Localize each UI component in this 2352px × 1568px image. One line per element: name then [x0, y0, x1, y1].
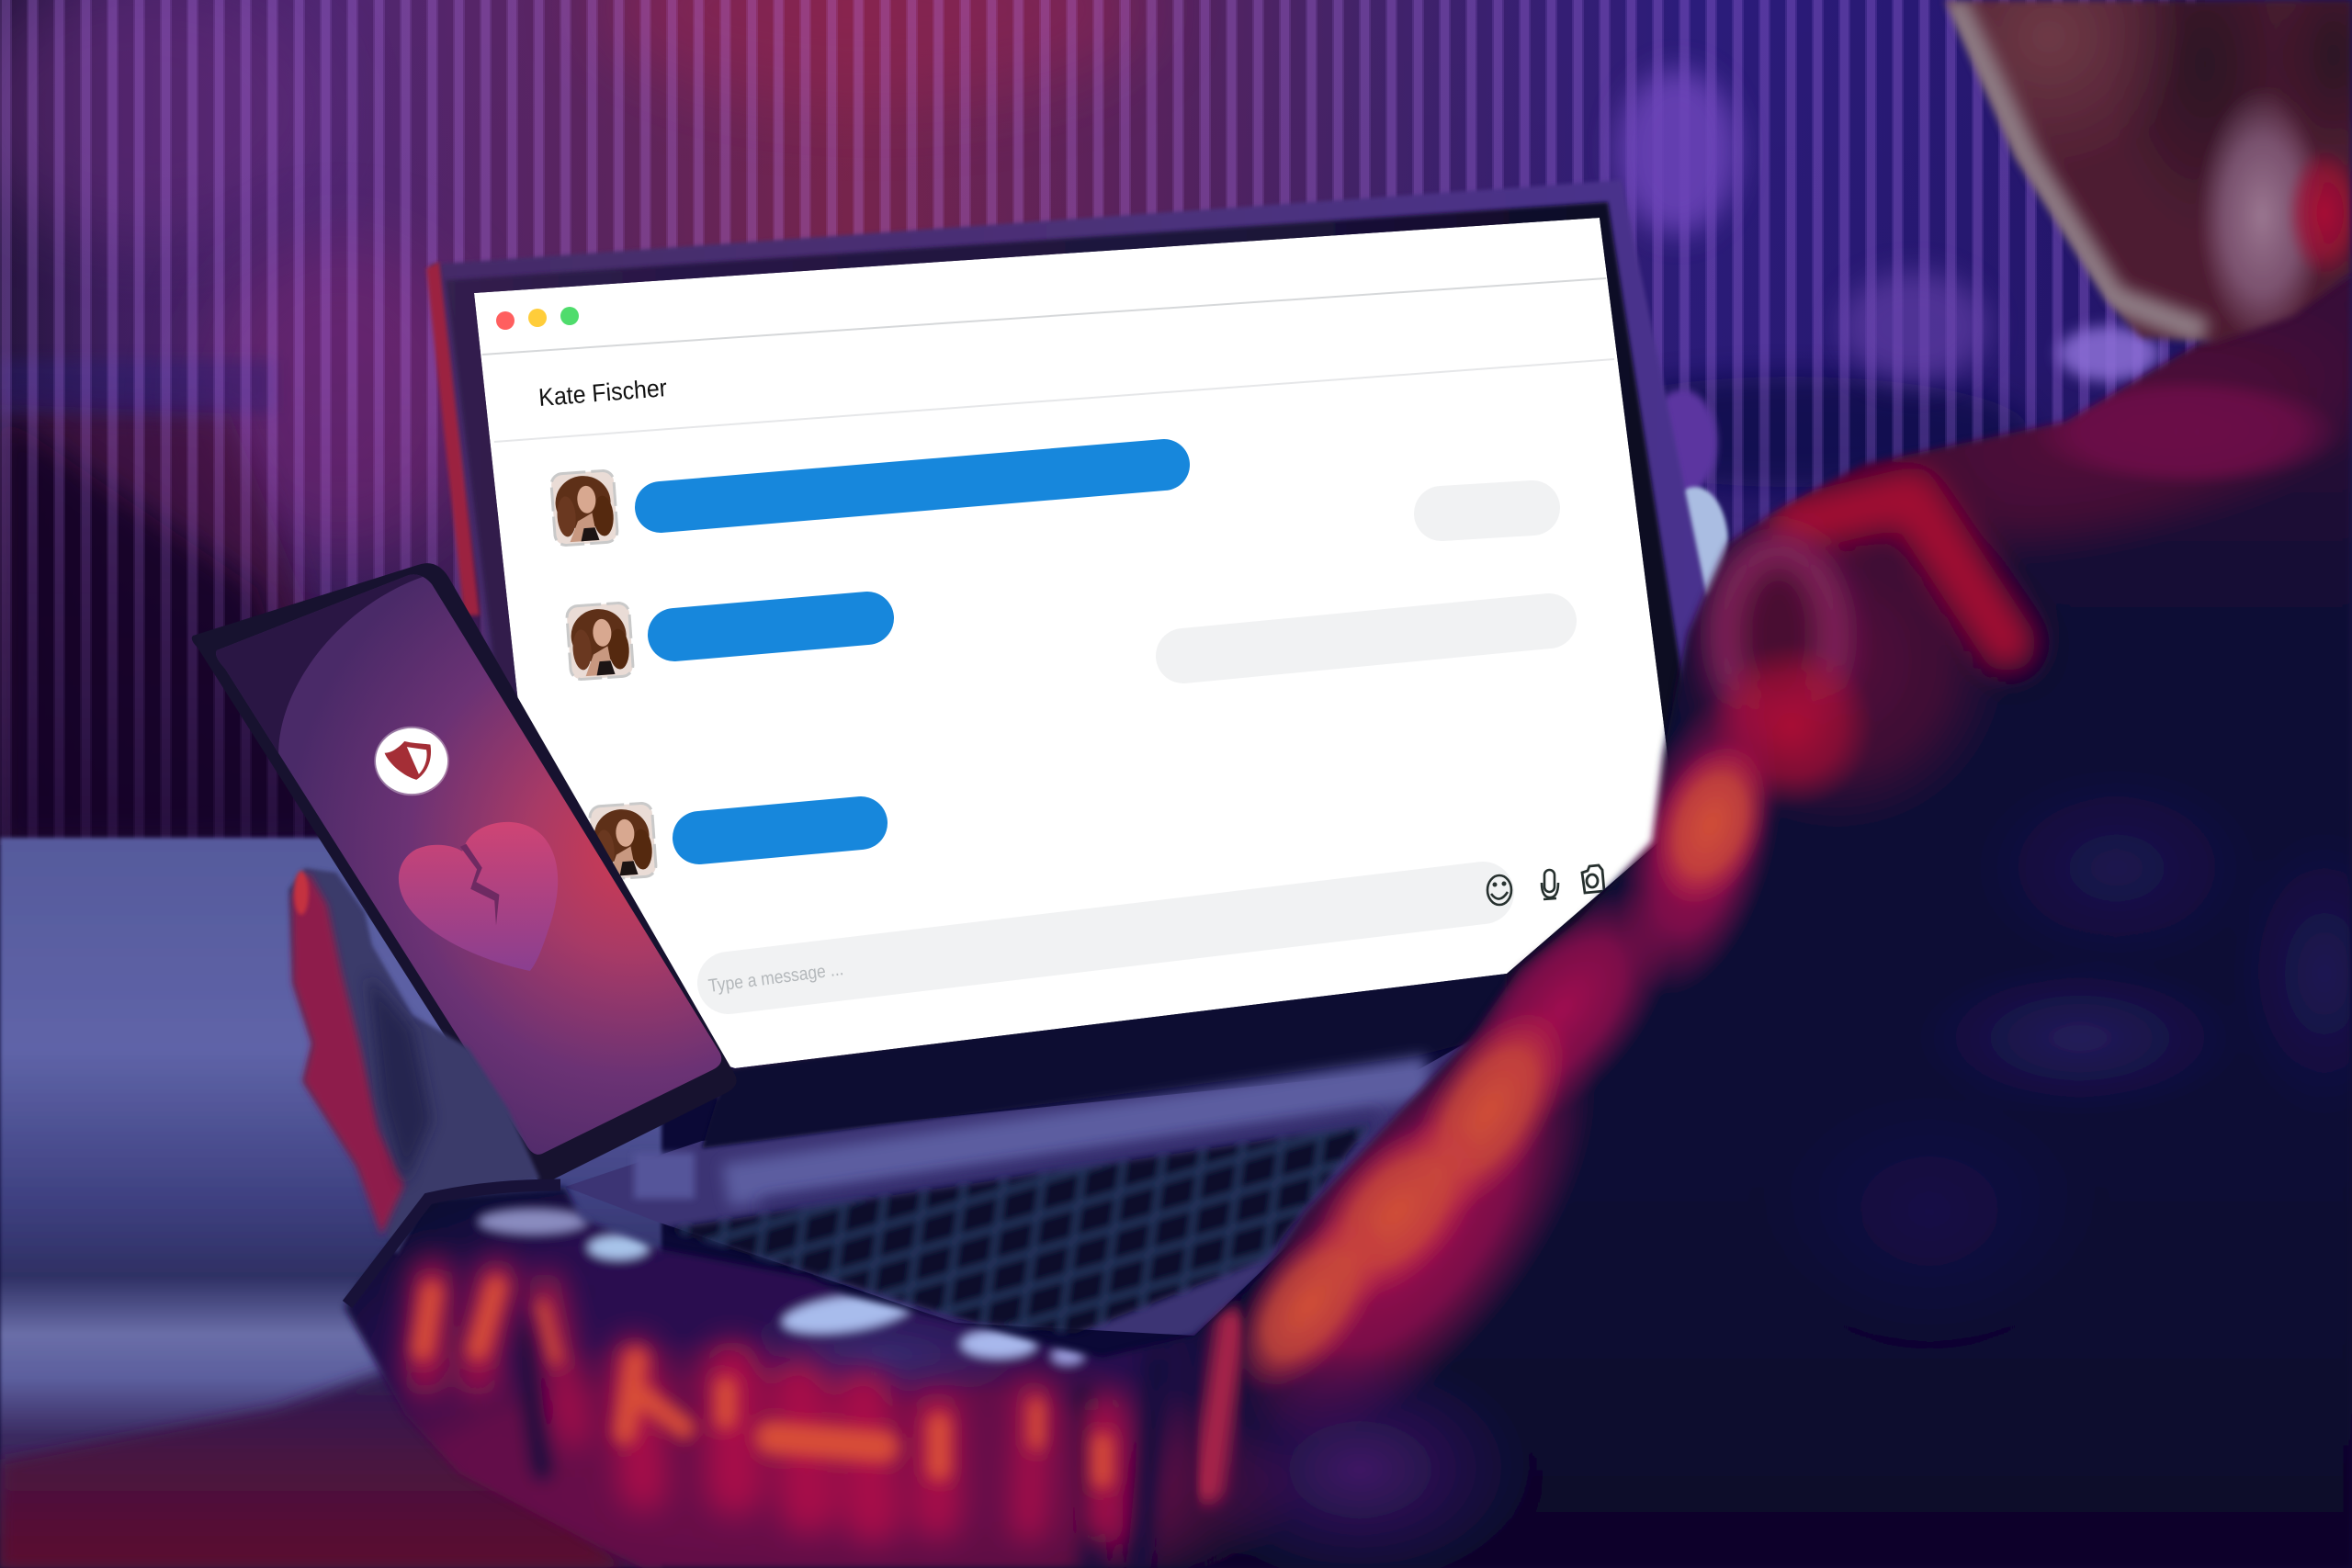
torso base — [276, 257, 2352, 1568]
laptop deck — [565, 1020, 1507, 1336]
hand dark shade — [368, 974, 432, 1185]
window controls — [496, 307, 579, 330]
outgoing bubble 1 — [1442, 508, 1532, 513]
shoulder bright patch — [2030, 377, 2343, 487]
ear inner — [2286, 147, 2352, 279]
outgoing bubble 2 — [1183, 621, 1549, 656]
neck shadow — [2104, 0, 2306, 239]
broken heart — [399, 822, 558, 971]
blurred background objects behind laptop — [1617, 69, 2159, 601]
chat window — [474, 218, 1677, 1068]
table corner — [0, 1366, 625, 1568]
avatar 1 — [550, 470, 618, 546]
incoming bubble 3 — [699, 823, 861, 838]
shoulder red fold — [1796, 496, 2007, 643]
phone — [184, 551, 753, 1194]
shoulder ring — [1722, 547, 1836, 721]
laptop hinge strip — [702, 964, 1507, 1148]
laptop red rim — [426, 262, 480, 615]
icon: shield badge — [376, 728, 447, 794]
forearm orange lower — [1275, 1088, 1518, 1337]
ear rim — [2198, 87, 2326, 344]
input placeholder: Type a message ... — [707, 959, 844, 997]
hinge block — [634, 1153, 695, 1199]
forearm orange — [1374, 978, 1603, 1245]
deck shadow band — [763, 1122, 1378, 1211]
thumb red reflection — [292, 873, 404, 1235]
wristband — [347, 1185, 560, 1304]
shoulder inner maroon — [1663, 487, 2012, 836]
sleeve magenta lower — [276, 1332, 1305, 1568]
upper arm magenta — [1589, 675, 1811, 1015]
icon: smiley — [1487, 875, 1511, 905]
sleeve white highlights — [478, 1209, 1084, 1365]
background: neon striped wall — [0, 0, 2352, 919]
phone screen — [184, 551, 753, 1194]
keyboard — [664, 1125, 1369, 1334]
laptop inner bezel — [446, 202, 1700, 1102]
jaw highlight — [1952, 0, 2205, 333]
thumbnail — [294, 871, 309, 915]
hand base — [288, 868, 540, 1255]
torso purple sheen — [1755, 758, 2352, 1350]
ear top dark — [2269, 0, 2352, 165]
ring lower red — [1709, 643, 1874, 808]
person: body, shoulder and arm — [248, 241, 2352, 1568]
sleeve blue panel — [726, 1300, 1038, 1410]
sleeve dark folds — [524, 1332, 1158, 1562]
desk surface — [0, 838, 662, 1568]
sleeve base — [248, 1157, 1277, 1568]
phone body — [192, 563, 737, 1181]
elbow orange — [1201, 1187, 1418, 1422]
forearm magenta — [1162, 954, 1668, 1507]
avatar 3 — [589, 803, 657, 880]
icon: camera — [1582, 865, 1604, 893]
upper face tone — [1911, 0, 2187, 175]
hand holding phone — [288, 868, 560, 1304]
person: head and ear — [1911, 0, 2352, 367]
laptop — [426, 180, 1750, 1336]
sleeve reflections orange — [423, 1286, 1102, 1479]
incoming bubble 1 — [661, 465, 1164, 507]
deck light band — [726, 1077, 1429, 1185]
avatar 2 — [566, 603, 634, 680]
contact name: Kate Fischer — [537, 374, 668, 412]
elbow strip — [1208, 1323, 1231, 1488]
sleeve reflections magenta — [424, 1277, 1102, 1525]
upper shoulder maroon — [1781, 241, 2352, 623]
arm purple lower — [1185, 1350, 1534, 1568]
incoming bubble 2 — [674, 618, 867, 635]
message input — [729, 893, 1483, 983]
heart crack — [460, 844, 499, 926]
icon: microphone — [1542, 870, 1558, 899]
shoulder to elbow magenta — [1408, 848, 1716, 1173]
laptop lid bezel — [430, 180, 1750, 1121]
upper arm orange glow — [1629, 724, 1792, 926]
